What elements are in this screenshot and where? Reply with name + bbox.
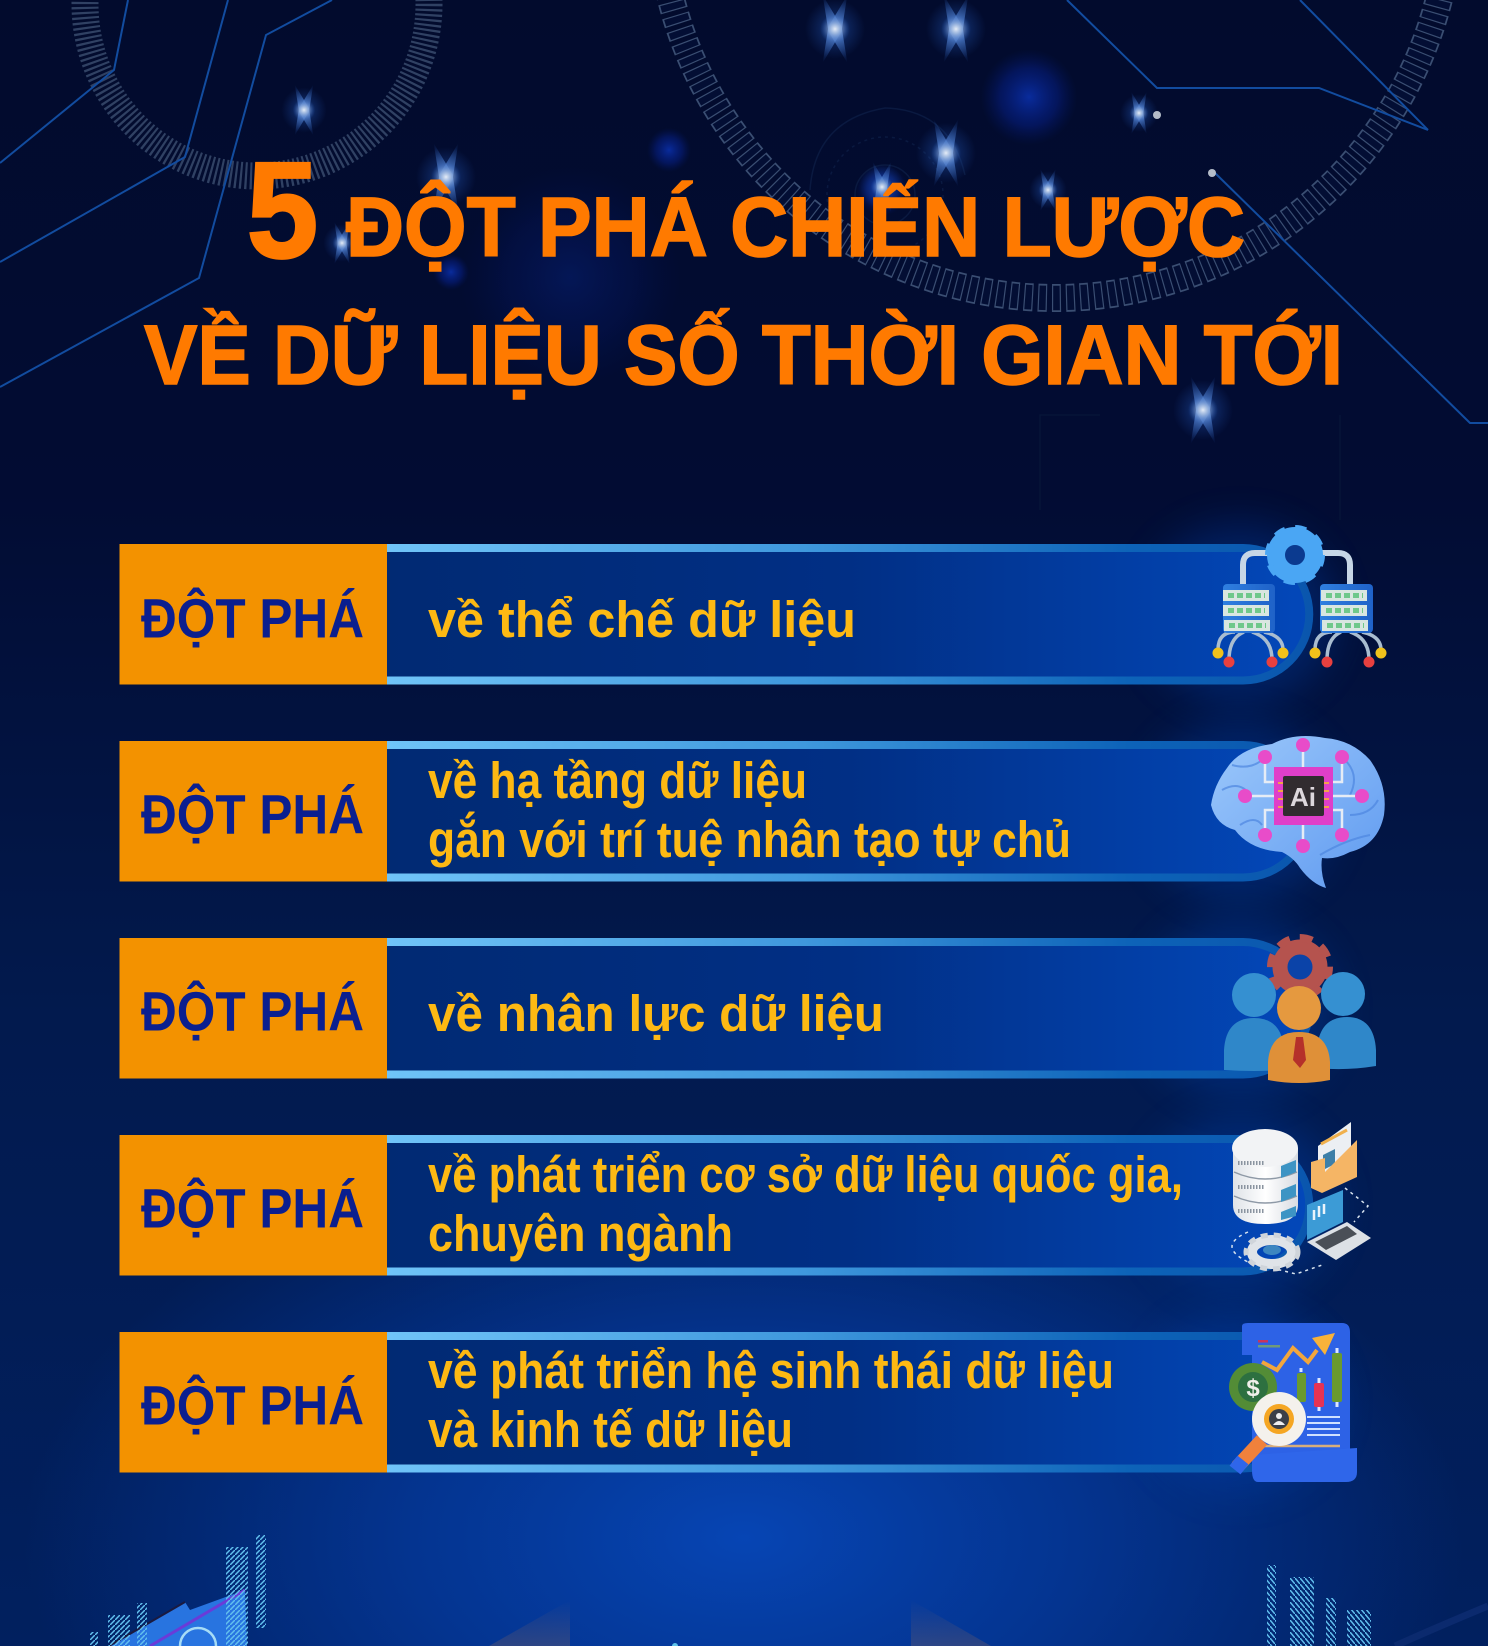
label [120,938,387,1078]
label [120,741,387,882]
bottom left data tower [90,1535,266,1646]
text [428,1342,1114,1458]
icon: people with gear [1224,938,1376,1083]
gear ring top left [85,0,429,176]
bottom light beams [489,1600,991,1646]
gear ring top right [659,0,1451,298]
title: ĐỘT PHÁ CHIẾN LƯỢC [346,180,1245,274]
title: 5 [247,134,318,286]
label: ĐỘT PHÁ [141,980,364,1042]
label: ĐỘT PHÁ [141,782,364,846]
text: về phát triển cơ sở dữ liệu quốc gia, [428,1146,1183,1203]
text [428,752,1071,868]
text: về thể chế dữ liệu [428,591,856,648]
icon: AI brain [1211,736,1385,888]
panel: row 3 [120,918,1335,1098]
panel: row 2 [120,721,1335,901]
label [120,1332,387,1472]
icon: finance report scroll [1229,1323,1357,1482]
panel: row 1 [120,524,1335,704]
label: ĐỘT PHÁ [141,586,364,650]
title [144,134,1343,402]
text: chuyên ngành [428,1205,733,1262]
sparkles [282,0,1233,446]
panel: row 5 [120,1312,1335,1492]
text: và kinh tế dữ liệu [428,1401,793,1458]
icon: database, folder, laptop [1232,1122,1371,1274]
label: ĐỘT PHÁ [141,1374,364,1436]
icon: data servers with gear [1212,528,1386,668]
circuit lines [0,0,1488,423]
text: về hạ tầng dữ liệu [428,752,807,809]
text: về phát triển hệ sinh thái dữ liệu [428,1342,1114,1399]
label [120,544,387,684]
text [428,1146,1183,1262]
text: về nhân lực dữ liệu [428,985,884,1042]
title: VỀ DỮ LIỆU SỐ THỜI GIAN TỚI [144,308,1343,402]
bottom right data tower [1267,1565,1488,1646]
panel: row 4 [120,1115,1335,1295]
chip label: Ai [1290,782,1316,812]
label [120,1135,387,1276]
coin symbol: $ [1246,1375,1260,1402]
label: ĐỘT PHÁ [141,1176,364,1240]
text: gắn với trí tuệ nhân tạo tự chủ [428,810,1071,868]
